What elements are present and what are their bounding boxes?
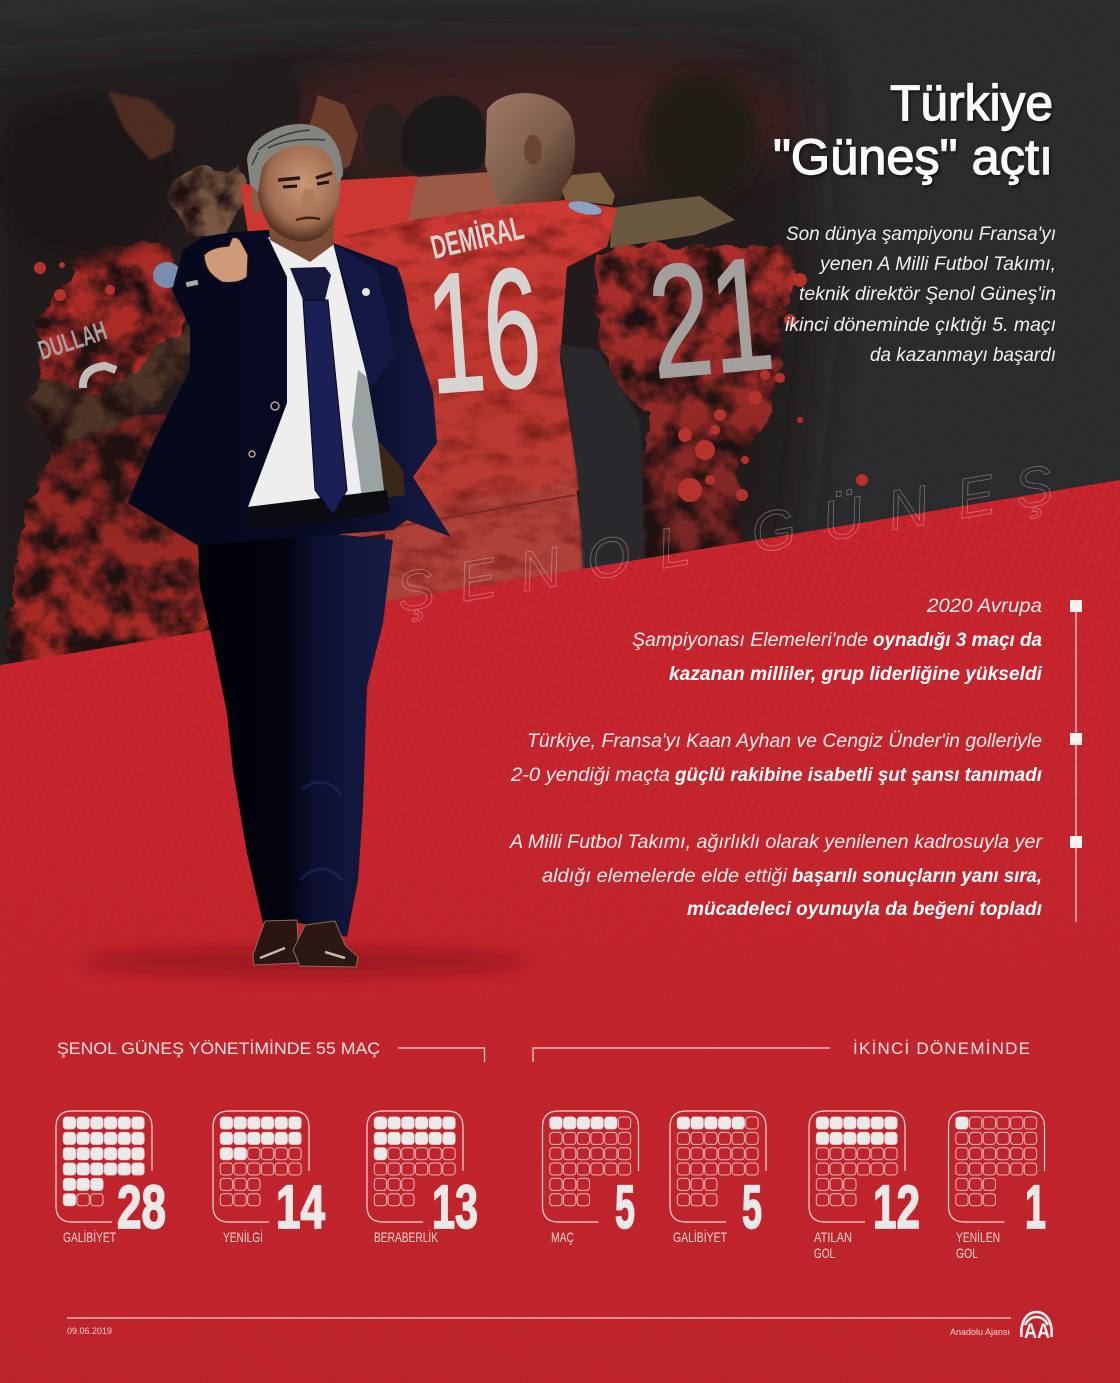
intro text block: teknik direktör Şenol Güneş'in: [799, 283, 1056, 305]
tattooed arm: [610, 196, 735, 248]
highlight 1 text: oynadığı 3 maçı da: [873, 629, 1042, 651]
stat: 28 wins: 28: [117, 1173, 166, 1241]
stat: 13 draws: 13: [432, 1173, 478, 1241]
pocket and hand shadow: [378, 440, 405, 498]
stat: 5 matches: 5: [615, 1173, 635, 1241]
section heading: 55 matches: [57, 1039, 484, 1062]
ear: [251, 185, 263, 213]
intro text block: da kazanmayı başardı: [870, 344, 1056, 366]
highlight 1 text: 2020 Avrupa: [926, 595, 1042, 617]
hand on shoulder: [562, 172, 615, 205]
tie blade: [303, 300, 347, 515]
jersey number fragment: [83, 366, 116, 388]
coach figure: Şenol Güneş: [80, 124, 530, 975]
hair strands: [252, 130, 325, 165]
nose: [300, 188, 318, 209]
intro text block: yenen A Milli Futbol Takımı,: [818, 253, 1056, 275]
sleeve badges: [153, 262, 181, 288]
jersey number 21: 21: [642, 223, 779, 412]
left player jersey: [38, 242, 190, 395]
dark base behind players: [0, 40, 820, 700]
highlight 1 text: Şampiyonası Elemeleri'nde: [632, 629, 868, 651]
left player hair: [0, 100, 173, 260]
section heading: second term: [533, 1039, 1030, 1062]
bald player head: [485, 93, 575, 205]
mouth: [296, 218, 320, 220]
neck: [268, 200, 335, 262]
red diagonal panel: [0, 480, 1120, 1383]
stat: 5 matches: MAÇ: [551, 1229, 574, 1245]
date: 09.06.2019: [67, 1326, 112, 1337]
ground shadow: [80, 949, 530, 975]
center player dark head: [402, 95, 486, 175]
shorts seam: [395, 495, 575, 527]
icon: Anadolu Agency logo: [1021, 1312, 1052, 1343]
player face profile: [310, 95, 358, 170]
jacket buttons: [271, 402, 279, 410]
intro text block: ikinci döneminde çıktığı 5. maçı: [785, 314, 1056, 336]
stat: 5 matches: [542, 1111, 638, 1245]
section heading: second term: İKİNCİ DÖNEMİNDE: [853, 1039, 1030, 1058]
title line 1: Türkiye: [890, 75, 1053, 131]
stat: 12 goals scored: GOL: [814, 1245, 835, 1261]
pointing hand: [204, 238, 248, 282]
jersey number 16: 16: [421, 233, 546, 430]
dark background: [0, 0, 1120, 700]
title: [773, 75, 1053, 185]
stat: 12 goals scored: 12: [873, 1173, 920, 1241]
stat: 13 draws: [367, 1111, 478, 1245]
highlight 2 text: 2-0 yendiği maçta: [510, 764, 670, 786]
agency name: Anadolu Ajansı: [950, 1327, 1010, 1338]
stat: 28 wins: [56, 1111, 166, 1245]
highlight 3 text: aldığı elemelerde elde ettiği: [542, 865, 788, 887]
highlight 3 text: A Milli Futbol Takımı, ağırlıklı olarak yenilenen kadrosuyla yer: [509, 831, 1044, 853]
left shoe: [253, 920, 299, 965]
footer rule: [67, 1317, 1011, 1319]
right player dark head: [642, 72, 758, 208]
highlight 2 text: güçlü rakibine isabetli şut şansı tanımadı: [674, 764, 1043, 786]
right player jersey: [592, 245, 795, 580]
center player jersey and shorts: [340, 200, 617, 602]
hair of player: [363, 104, 407, 172]
jacket: [128, 230, 451, 545]
stat: 5 wins: GALİBİYET: [673, 1228, 727, 1245]
stat: 14 losses: YENİLGİ: [223, 1228, 263, 1245]
title line 2: "Güneş" açtı: [773, 129, 1053, 185]
highlight 3 text: mücadeleci oyunuyla da beğeni topladı: [687, 898, 1043, 920]
second player dark head: [270, 72, 302, 130]
stat: 1 goal conceded: YENİLEN: [956, 1228, 1000, 1245]
red splatter: [34, 262, 868, 502]
belt: [247, 490, 390, 528]
sleeve cuff logo: [186, 280, 198, 287]
necktie: [290, 267, 347, 515]
shoe highlights: [260, 948, 345, 958]
hair: [247, 124, 343, 192]
stat: 14 losses: [213, 1111, 325, 1245]
red sleeve behind head: [240, 176, 417, 250]
stat: 28 wins: GALİBİYET: [63, 1228, 116, 1245]
bald player ear: [524, 135, 542, 165]
stat: 13 draws: BERABERLİK: [374, 1228, 438, 1245]
stat: 5 wins: [670, 1111, 766, 1245]
shirt shadow: [352, 370, 387, 498]
jersey name: DEMİRAL: [427, 209, 527, 266]
eyes: [283, 182, 329, 187]
EURO sleeve patches: [568, 201, 602, 215]
right shoe: [293, 921, 358, 967]
halftone dots: [0, 480, 1120, 1000]
trouser folds: [300, 782, 342, 880]
intro text block: Son dünya şampiyonu Fransa'yı: [786, 223, 1056, 245]
jersey name fragment: DULLAH: [35, 316, 110, 366]
stat: 1 goal conceded: GOL: [956, 1245, 978, 1261]
lapel pin: [362, 288, 370, 296]
highlight 1 text: kazanan milliler, grup liderliğine yükseldi: [669, 663, 1043, 685]
timeline connector: [1070, 600, 1082, 922]
eyebrows: [278, 173, 332, 180]
stat: 12 goals scored: [809, 1111, 920, 1261]
stat: 14 losses: 14: [276, 1173, 325, 1241]
intro text block: [785, 223, 1056, 366]
highlight 1 text: [632, 595, 1043, 685]
left player face: [108, 92, 175, 160]
left player lower jersey: [10, 405, 215, 672]
trousers: [197, 520, 393, 937]
tie knot: [290, 267, 331, 300]
section heading: 55 matches: ŞENOL GÜNEŞ YÖNETİMİNDE 55 MAÇ: [57, 1039, 380, 1058]
stat: 5 wins: 5: [742, 1173, 762, 1241]
highlight 2 text: Türkiye, Fransa'yı Kaan Ayhan ve Cengiz Ünder'in golleriyle: [527, 730, 1042, 752]
hands behind coach: [165, 165, 248, 238]
stat: 1 goal conceded: 1: [1025, 1173, 1046, 1241]
watermark name: ŞENOL GÜNEŞ: ŞENOL GÜNEŞ: [392, 453, 1057, 624]
dark gap between players: [558, 344, 646, 569]
highlight 2 text: [510, 730, 1043, 786]
right lapel: [333, 243, 395, 390]
icon: Anadolu Agency logo: AA: [1024, 1320, 1050, 1343]
sleeve skin arm: [408, 172, 523, 221]
highlight 3 text: [509, 831, 1044, 920]
stat: 12 goals scored: ATILAN: [814, 1229, 852, 1245]
left player: [10, 165, 795, 672]
highlight 3 text: başarılı sonuçların yanı sıra,: [792, 865, 1042, 887]
team photo: celebrating players: [0, 40, 868, 700]
shirt: [248, 237, 387, 507]
dark red haze behind players: [270, 50, 810, 190]
left player arm: [25, 325, 190, 442]
face: [257, 144, 341, 241]
stat: 1 goal conceded: [948, 1111, 1046, 1261]
